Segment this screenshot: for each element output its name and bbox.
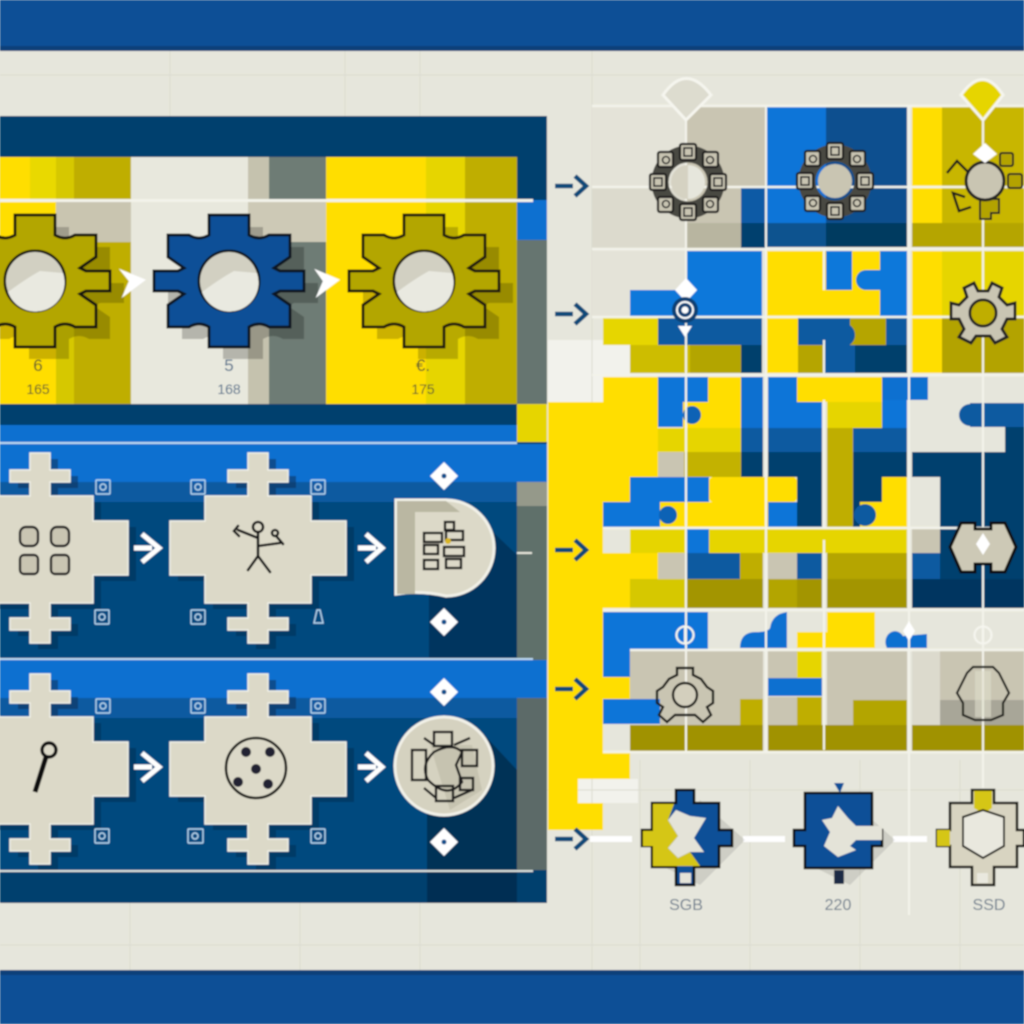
gear 2 with label: 5 [224,356,234,375]
gear 1 with label: 165 [26,381,50,397]
panel: gear sequence band [0,157,533,404]
result: circular gear badge [395,717,493,815]
icon: outline gear row four left [657,668,713,722]
arrow 2 [317,271,338,295]
icon: outline gear row four right [957,667,1009,720]
diamond markers [430,678,458,856]
gear 1 with label [0,215,124,397]
arrows into grid [555,176,586,849]
step: key icon [0,674,136,870]
step: circle with dots [170,674,354,870]
panel: grid row four [603,612,1024,752]
gear 2 with label: 168 [217,381,241,397]
step: shield icons [0,453,136,649]
icon: ring gear right [947,143,1022,219]
footer bar [0,970,1024,1024]
panel: process row two [0,658,547,903]
step: stick figure [170,453,354,649]
arrow [134,534,159,562]
grid lines [592,106,1024,915]
gear 1 with label: 6 [33,356,43,375]
puzzle piece 3 with label: SSD [973,897,1005,914]
icon: ring gear centre [797,143,873,219]
panel: left navy frame [0,116,547,903]
icon: fan marker left [663,78,711,120]
arrow [134,753,159,781]
icon: small circle markers [676,621,992,644]
puzzle piece 3 with label [937,790,1024,914]
gear 3 with label: €. [416,356,430,375]
panel: grid row two [592,251,1024,373]
connector dashes [590,836,927,842]
header bar [0,0,1024,51]
arrow 1 [122,271,144,295]
puzzle piece 1 with label: SGB [669,897,703,914]
icon: target marker [672,278,698,337]
arrow [358,753,382,781]
puzzle piece 2 with label: 220 [825,897,851,914]
puzzle piece 2 with label [794,783,895,914]
icon: fan marker right [961,80,1003,120]
panel: grid row one [592,107,1024,248]
result: D-shaped badge [396,500,517,659]
small icons [95,480,325,624]
arrow [358,534,382,562]
puzzle piece 1 with label [642,790,745,914]
gear 2 with label [154,215,318,397]
panel: grid row three [603,377,1024,608]
icon: hexagonal puzzle gear [950,523,1016,572]
gear 3 with label: 175 [411,381,435,397]
diamond markers [430,462,458,636]
panel: yellow spine [548,377,658,830]
panel: process row one [0,442,547,660]
small icons [95,699,325,843]
icon: ring gear left [650,144,726,220]
icon: tan gear [951,283,1015,343]
gear 3 with label [349,215,513,397]
